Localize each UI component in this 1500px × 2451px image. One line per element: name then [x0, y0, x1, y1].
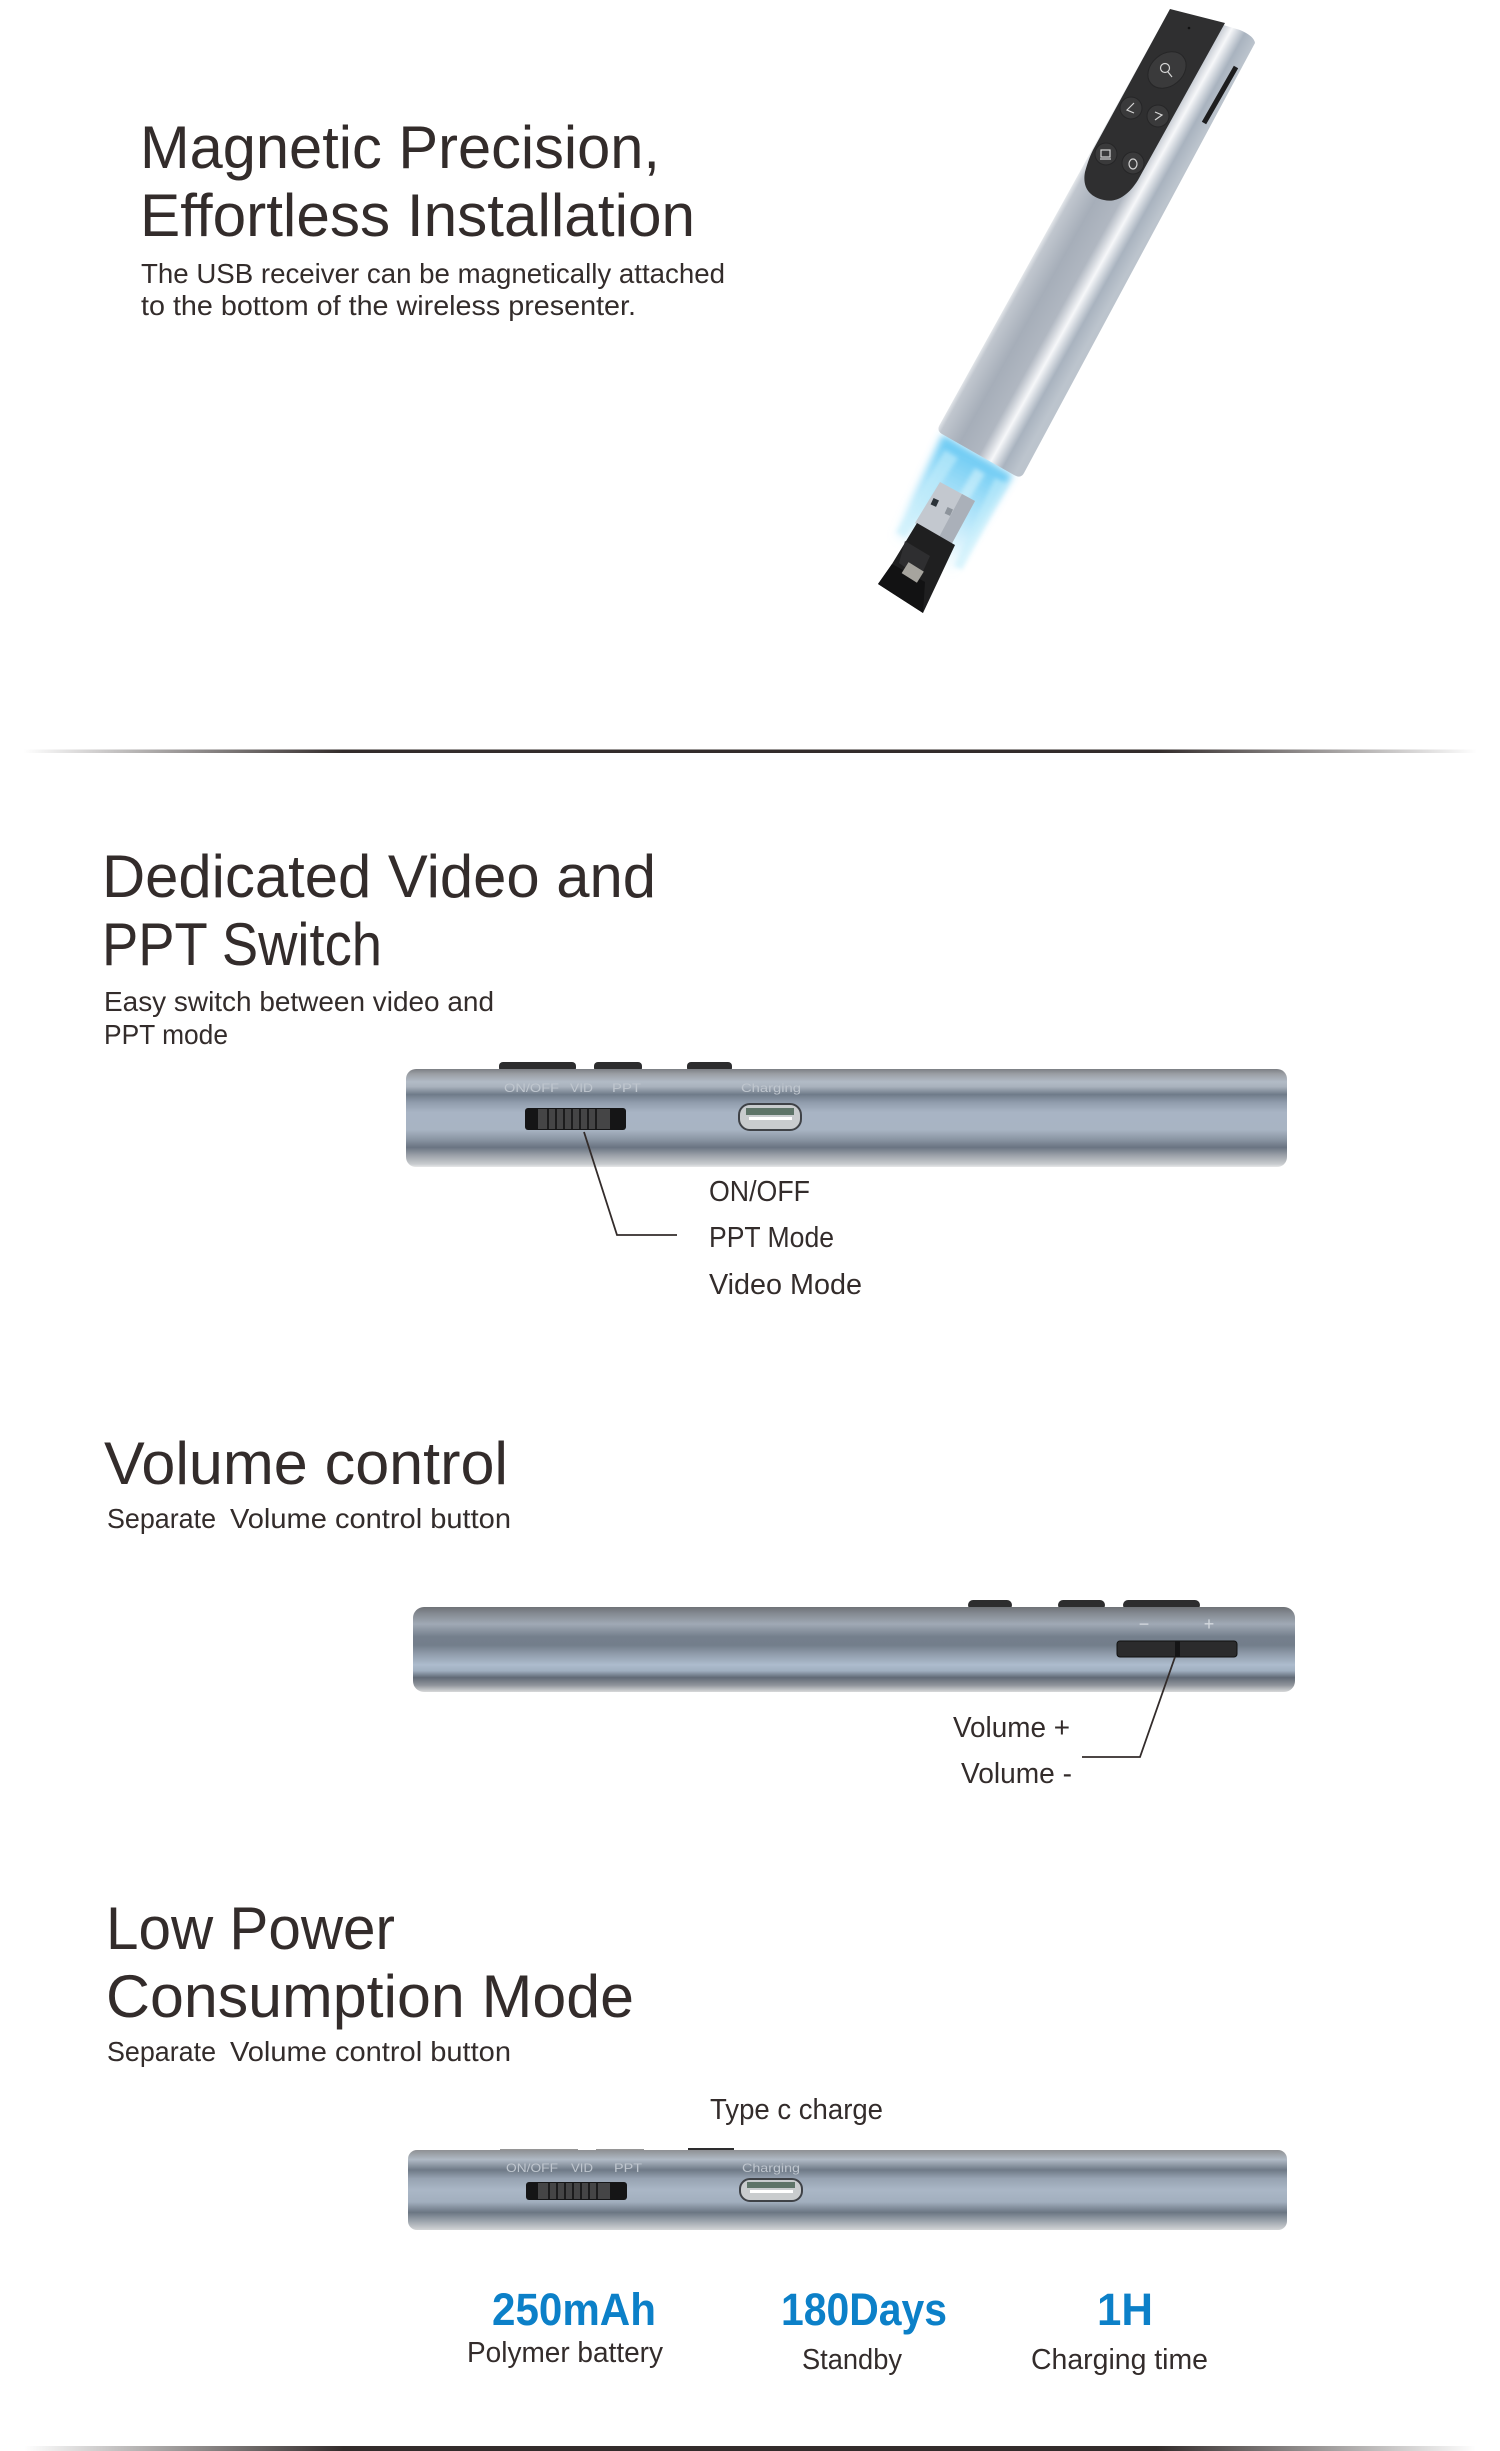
device side view: switch	[406, 1062, 1287, 1167]
product image: presenter with USB receiver	[878, 9, 1255, 613]
description: magnetic attachment: to the bottom of the wireless presenter.	[141, 290, 636, 321]
heading: dedicated switch: PPT Switch	[102, 911, 382, 978]
description: switch: PPT mode	[104, 1019, 228, 1050]
engraved labels: PPT	[612, 1081, 642, 1095]
indicator dot	[1188, 27, 1190, 29]
labels: switch modes: Video Mode	[709, 1269, 862, 1301]
engraved labels: Charging	[741, 1081, 801, 1095]
engraved labels: VID	[571, 2161, 593, 2175]
engraved labels	[504, 1081, 801, 1095]
engraved labels	[506, 2161, 800, 2175]
engraved labels: Charging	[742, 2161, 800, 2175]
presenter body	[938, 9, 1255, 477]
label: type c charge: Type c charge	[710, 2094, 883, 2126]
magnetic glow	[893, 434, 1013, 574]
stat: standby: 180Days	[781, 2284, 947, 2335]
heading: dedicated switch	[102, 843, 656, 978]
engraved labels: PPT	[614, 2161, 643, 2175]
labels: volume: Volume -	[961, 1758, 1072, 1790]
slide switch	[525, 1108, 626, 1130]
stat: battery: 250mAh	[492, 2284, 656, 2335]
device body	[406, 1069, 1287, 1167]
section: low power	[106, 1895, 1287, 2376]
slide switch	[526, 2182, 627, 2200]
engraved labels: ON/OFF	[504, 1081, 559, 1095]
description: magnetic attachment	[141, 258, 725, 321]
labels: volume: Volume +	[953, 1712, 1070, 1744]
heading: magnetic precision: Effortless Installation	[140, 182, 695, 249]
description: volume: Separate	[107, 1503, 216, 1534]
heading: magnetic precision: Magnetic Precision,	[140, 114, 660, 181]
button panel	[1084, 9, 1225, 201]
leader line: volume	[1082, 1657, 1175, 1757]
presenter buttons	[1095, 44, 1193, 174]
section: volume control	[104, 1430, 1295, 1790]
description: volume	[107, 1503, 511, 1534]
heading: dedicated switch: Dedicated Video and	[102, 843, 656, 910]
device body	[408, 2150, 1287, 2230]
side volume key	[1204, 67, 1236, 123]
stat: standby	[781, 2284, 947, 2376]
labels: switch modes: PPT Mode	[709, 1222, 834, 1254]
description: low power: Volume control button	[230, 2036, 511, 2067]
heading: magnetic precision	[140, 114, 695, 249]
top buttons	[968, 1600, 1200, 1610]
USB-C port	[740, 2179, 802, 2201]
labels: volume	[953, 1712, 1072, 1790]
USB receiver body	[878, 523, 955, 613]
labels: switch modes	[709, 1176, 862, 1301]
volume rocker	[1117, 1641, 1237, 1657]
heading: low power: Consumption Mode	[106, 1963, 634, 2030]
heading: low power: Low Power	[106, 1895, 395, 1962]
engraved labels: VID	[570, 1081, 593, 1095]
top buttons	[499, 1062, 732, 1072]
description: switch: Easy switch between video and	[104, 986, 494, 1017]
description: volume: Volume control button	[230, 1503, 511, 1534]
top buttons	[500, 2148, 734, 2151]
stat: charging time: 1H	[1097, 2284, 1153, 2335]
device side view: charging	[408, 2148, 1287, 2230]
engraved labels: ON/OFF	[506, 2161, 558, 2175]
stat: charging time: Charging time	[1031, 2344, 1208, 2376]
device body	[413, 1607, 1295, 1692]
device side view: volume	[413, 1600, 1295, 1692]
description: low power: Separate	[107, 2036, 216, 2067]
labels: switch modes: ON/OFF	[709, 1176, 810, 1208]
stat: standby: Standby	[802, 2344, 902, 2376]
button icons	[1100, 64, 1172, 169]
USB-C port	[739, 1104, 801, 1130]
description: low power	[107, 2036, 511, 2067]
description: switch	[104, 986, 494, 1050]
stat: battery: Polymer battery	[467, 2337, 663, 2369]
heading: low power	[106, 1895, 634, 2030]
description: magnetic attachment: The USB receiver can be magnetically attached	[141, 258, 725, 289]
volume marks: +	[1204, 1614, 1214, 1634]
section: magnetic installation	[140, 9, 1255, 613]
section: video and PPT switch	[102, 843, 1287, 1301]
heading: volume control: Volume control	[104, 1430, 508, 1497]
stat: battery	[467, 2284, 663, 2369]
volume marks	[1139, 1614, 1214, 1634]
volume marks: −	[1139, 1614, 1149, 1634]
USB connector	[915, 482, 975, 547]
leader line: switch	[584, 1132, 677, 1235]
stat: charging time	[1031, 2284, 1208, 2376]
bottom divider	[24, 2446, 1476, 2451]
divider	[23, 750, 1477, 753]
